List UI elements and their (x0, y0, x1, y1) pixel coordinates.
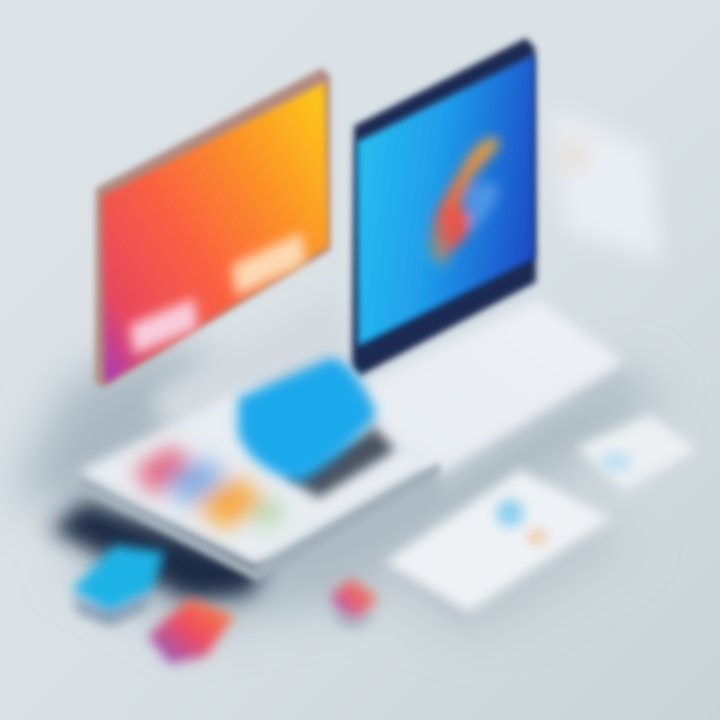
monitor screen (102, 82, 328, 384)
panel: laptop keyboard base (365, 300, 625, 495)
panel: small white card right (576, 414, 697, 490)
laptop screen (357, 54, 534, 346)
tablet body (78, 385, 440, 566)
panel: white document card front (385, 470, 612, 626)
icon: cyan tile bottom left (72, 545, 165, 626)
monitor stand (150, 290, 358, 430)
panel: blue laptop screen (352, 38, 536, 376)
document card marks (496, 499, 547, 544)
panel: orange gradient monitor (95, 68, 330, 388)
icon: small multicolor cube (330, 578, 378, 630)
panel: white tablet platform (50, 385, 440, 600)
tablet shadow edge (50, 500, 265, 600)
dark keypad (285, 428, 395, 498)
cast shadows (10, 340, 660, 640)
colorful app tiles (134, 446, 288, 530)
icon: multicolor tile bottom (148, 598, 234, 664)
blue folder (238, 358, 376, 482)
tablet front edge (78, 462, 440, 582)
panel: floating translucent card (550, 108, 662, 262)
panel: blue folder with dark keypad (238, 358, 395, 498)
small card blue mark (600, 452, 632, 472)
monitor edge (95, 68, 330, 388)
laptop frame (352, 38, 536, 376)
screen button: white left (130, 298, 198, 355)
colorful logo swirl (429, 137, 500, 268)
screen button: white right (232, 232, 306, 296)
